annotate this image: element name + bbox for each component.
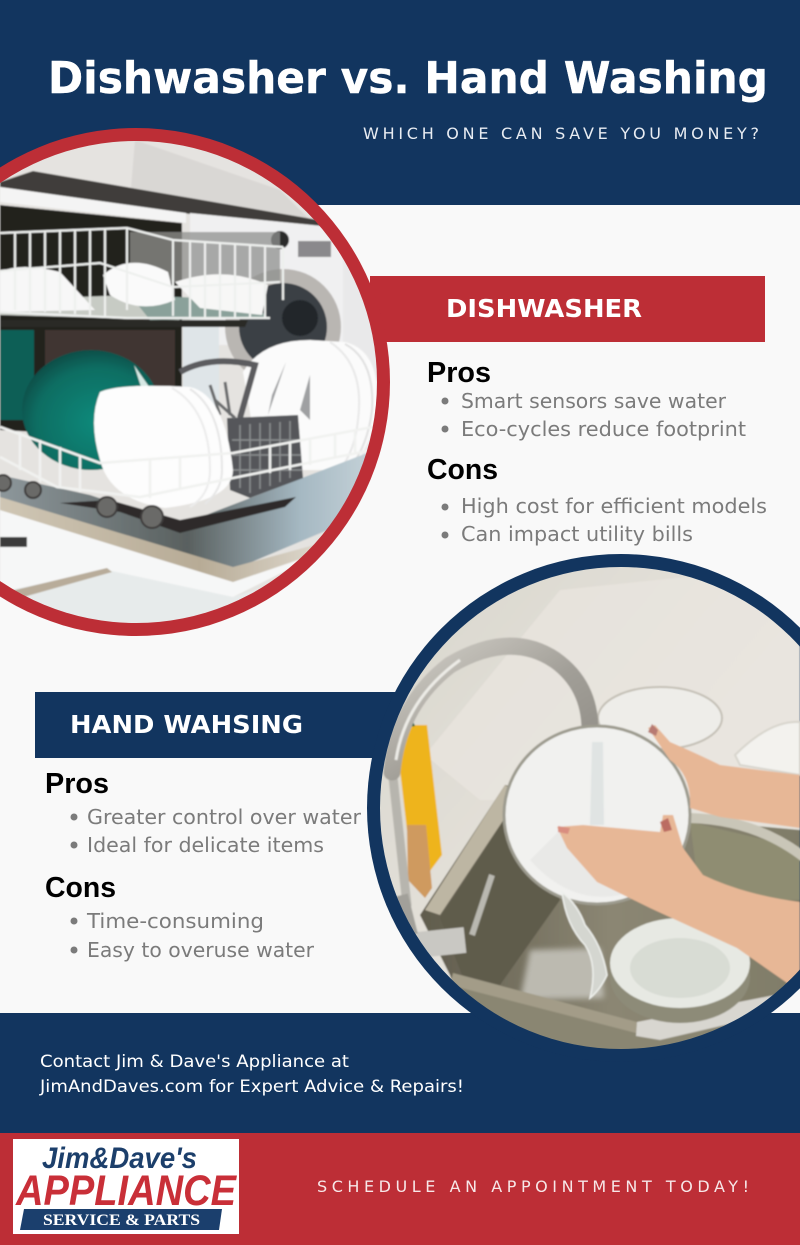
door front and steel lip [0, 497, 333, 598]
photo: dishwasher in red circle [0, 128, 390, 640]
footer contact band: JimAndDaves.com for Expert Advice & Repairs! [39, 1077, 464, 1097]
cons heading: Cons [45, 872, 116, 904]
door tray and dark floor [0, 450, 375, 570]
floor [28, 572, 257, 623]
water splash [562, 892, 607, 998]
photo: hand washing in navy circle [367, 554, 800, 1070]
panel heading bar: dishwasher: DISHWASHER [446, 294, 642, 323]
front plates [94, 386, 233, 508]
background plates [598, 687, 722, 749]
hands [557, 725, 800, 992]
bottom bowl [610, 918, 750, 1023]
lower rack [0, 427, 373, 498]
logo: Jim & Dave's Appliance: APPLIANCE [15, 1167, 237, 1215]
panel heading bar: hand washing: HAND WAHSING [70, 710, 303, 739]
upper rack [0, 228, 283, 327]
cons list [442, 494, 767, 546]
cons list [70, 909, 315, 962]
subtitle: WHICH ONE CAN SAVE YOU MONEY? [363, 124, 759, 143]
right plates [243, 340, 377, 470]
cons list: Easy to overuse water [87, 938, 315, 962]
pros list: Smart sensors save water [461, 389, 727, 413]
title: Dishwasher vs. Hand Washing [48, 53, 768, 104]
logo: Jim & Dave's Appliance [13, 1139, 239, 1234]
pros list [442, 389, 746, 441]
wheels [0, 475, 163, 528]
contact text: Contact Jim & Dave's Appliance at [40, 1052, 349, 1072]
panel heading bar: dishwasher [370, 276, 765, 342]
pros list: Greater control over water [87, 805, 362, 829]
cons heading: Cons [427, 454, 498, 486]
panel heading bar: hand washing [35, 692, 405, 758]
cta text: SCHEDULE AN APPOINTMENT TODAY! [317, 1177, 749, 1196]
panel: dishwasher pros and cons [427, 357, 767, 546]
header band [0, 0, 800, 205]
pros list: Ideal for delicate items [87, 833, 324, 857]
teal bowl [22, 350, 160, 470]
yellow bottle [400, 713, 442, 898]
pros list [70, 805, 362, 857]
cons list: High cost for efficient models [461, 494, 767, 518]
footer call-to-action band [0, 1133, 800, 1245]
pros heading: Pros [45, 768, 109, 800]
faucet [392, 646, 590, 945]
cons list: Can impact utility bills [461, 522, 693, 546]
pros heading: Pros [427, 357, 491, 389]
panel: hand washing pros and cons [45, 768, 362, 962]
sink [420, 784, 800, 1023]
page background [0, 205, 800, 1013]
cutlery basket [180, 361, 255, 418]
pros list: Eco-cycles reduce footprint [461, 417, 746, 441]
cons list: Time-consuming [86, 909, 264, 933]
logo: Jim & Dave's Appliance: Jim&Dave's [42, 1142, 197, 1175]
logo: Jim & Dave's Appliance: SERVICE & PARTS [43, 1212, 200, 1229]
footer contact band [0, 1013, 800, 1133]
plate [504, 726, 690, 904]
